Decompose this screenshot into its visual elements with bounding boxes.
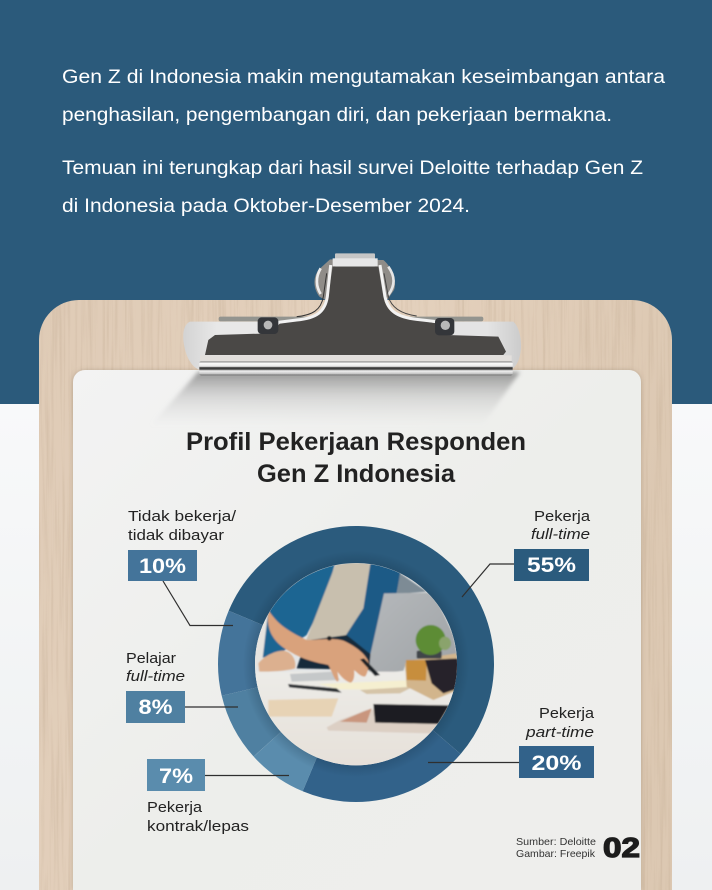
segment: pekerja kontrak 7% — [200, 508, 512, 820]
title: Gen Z Indonesia — [257, 460, 456, 488]
title: Profil Pekerjaan Responden — [186, 428, 526, 456]
intro text: di Indonesia pada Oktober-Desember 2024. — [62, 196, 470, 217]
page number: 02 — [603, 832, 640, 863]
source credit: Gambar: Freepik — [516, 848, 596, 860]
clip screws — [258, 317, 454, 335]
label: pekerja full-time 55%: full-time — [531, 526, 590, 543]
clip rear rods — [219, 317, 483, 321]
label: tidak bekerja 10%: 10% — [139, 555, 186, 578]
label: pekerja kontrak/lepas 7%: 7% — [159, 765, 193, 788]
label: pelajar full-time 8%: Pelajar — [126, 650, 176, 667]
clip bottom bar — [199, 355, 513, 375]
label: pekerja part-time 20% — [519, 705, 595, 778]
clip hinge — [314, 253, 395, 301]
segment: pekerja full-time 55% — [200, 508, 512, 820]
label: pelajar full-time 8%: 8% — [138, 696, 173, 719]
label: pekerja part-time 20%: Pekerja — [539, 705, 595, 722]
label: tidak bekerja 10% — [128, 508, 237, 581]
leader lines — [163, 564, 519, 776]
label: tidak bekerja 10%: tidak dibayar — [128, 527, 224, 544]
donut chart — [187, 495, 525, 833]
segment: tidak bekerja 10% — [212, 520, 500, 808]
label: pekerja part-time 20%: part-time — [525, 724, 594, 741]
clip dark plate — [205, 267, 506, 355]
background: lower light area — [0, 404, 712, 890]
label: pekerja part-time 20%: 20% — [532, 752, 582, 775]
clip silver base — [183, 322, 521, 370]
label: pekerja full-time 55%: 55% — [527, 554, 576, 577]
label: pelajar full-time 8%: full-time — [126, 668, 185, 685]
label: pekerja kontrak/lepas 7% — [147, 759, 249, 835]
label: pelajar full-time 8% — [126, 650, 185, 723]
intro text: penghasilan, pengembangan diri, dan pekerjaan bermakna. — [62, 105, 612, 126]
paper sheet — [73, 370, 641, 890]
source credit: Sumber: Deloitte — [516, 836, 596, 848]
photo: hands on desk with laptop — [253, 562, 460, 768]
segment: pekerja part-time 20% — [187, 495, 525, 833]
label: pekerja kontrak/lepas 7%: kontrak/lepas — [147, 818, 249, 835]
clip shadow on paper — [166, 370, 521, 413]
label: pekerja full-time 55%: Pekerja — [534, 508, 591, 525]
segment: pelajar full-time 8% — [187, 495, 525, 833]
background: blue header area — [0, 0, 712, 404]
clip chrome trim — [270, 258, 443, 323]
intro text: Temuan ini terungkap dari hasil survei Deloitte terhadap Gen Z — [62, 158, 643, 179]
label: pekerja kontrak/lepas 7%: Pekerja — [147, 799, 203, 816]
label: pekerja full-time 55% — [514, 508, 591, 581]
intro text — [62, 67, 665, 217]
icon: metal clip — [183, 253, 521, 375]
source credit — [516, 836, 596, 860]
clipboard wooden board — [39, 300, 672, 890]
title — [186, 428, 526, 488]
label: tidak bekerja 10%: Tidak bekerja/ — [128, 508, 237, 525]
intro text: Gen Z di Indonesia makin mengutamakan keseimbangan antara — [62, 67, 665, 88]
